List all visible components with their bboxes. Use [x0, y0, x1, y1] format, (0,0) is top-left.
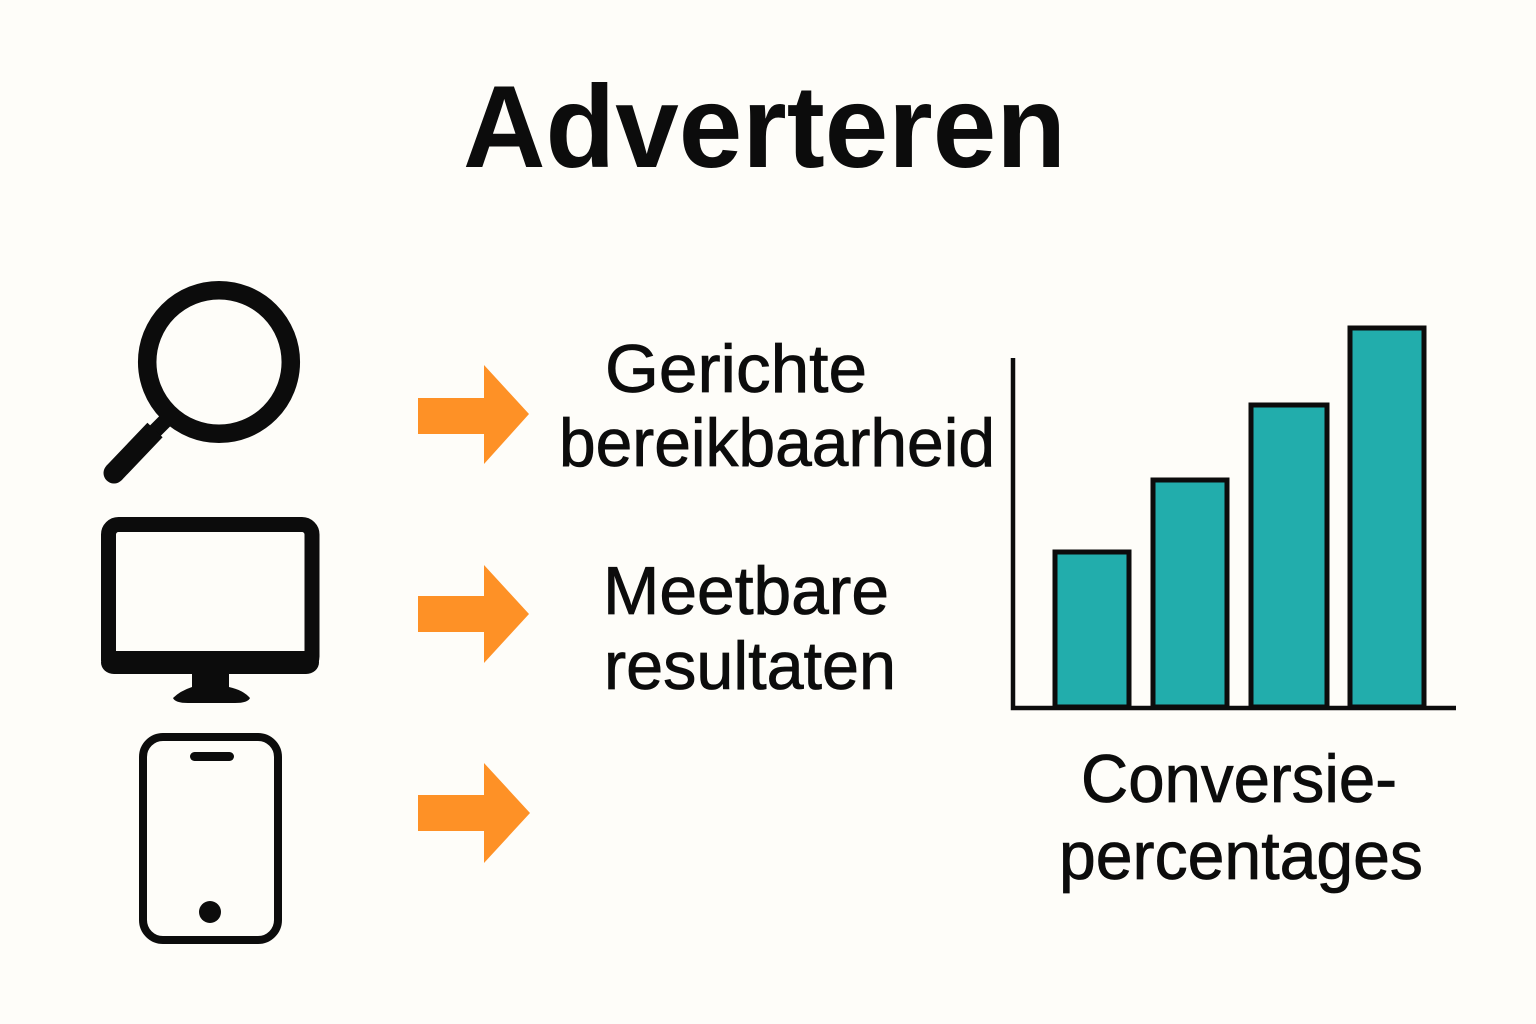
text: Meetbare resultaten: resultaten [604, 628, 896, 704]
bar chart [1013, 328, 1456, 708]
bar 1 [1055, 552, 1129, 707]
chart label: percentages [1059, 818, 1423, 894]
bar 2 [1153, 480, 1227, 707]
text: Gerichte bereikbaarheid [559, 331, 995, 481]
chart axes [1013, 358, 1456, 708]
text: Meetbare resultaten [603, 553, 896, 704]
title: Adverteren [463, 61, 1066, 192]
arrow: phone [418, 763, 530, 863]
arrow: monitor to measurable results [418, 565, 529, 663]
chart label [1059, 741, 1423, 894]
chart label: Conversie- [1081, 741, 1397, 817]
text: Meetbare resultaten: Meetbare [603, 553, 889, 629]
icon: smartphone [143, 737, 278, 940]
text: Gerichte bereikbaarheid: Gerichte [605, 331, 867, 407]
bar 3 [1251, 405, 1327, 707]
arrow: search to targeted reach [418, 365, 529, 464]
text: Gerichte bereikbaarheid: bereikbaarheid [559, 405, 995, 481]
bar 4 [1350, 328, 1424, 707]
icon: magnifying glass [104, 290, 291, 484]
icon: desktop monitor [101, 524, 319, 703]
